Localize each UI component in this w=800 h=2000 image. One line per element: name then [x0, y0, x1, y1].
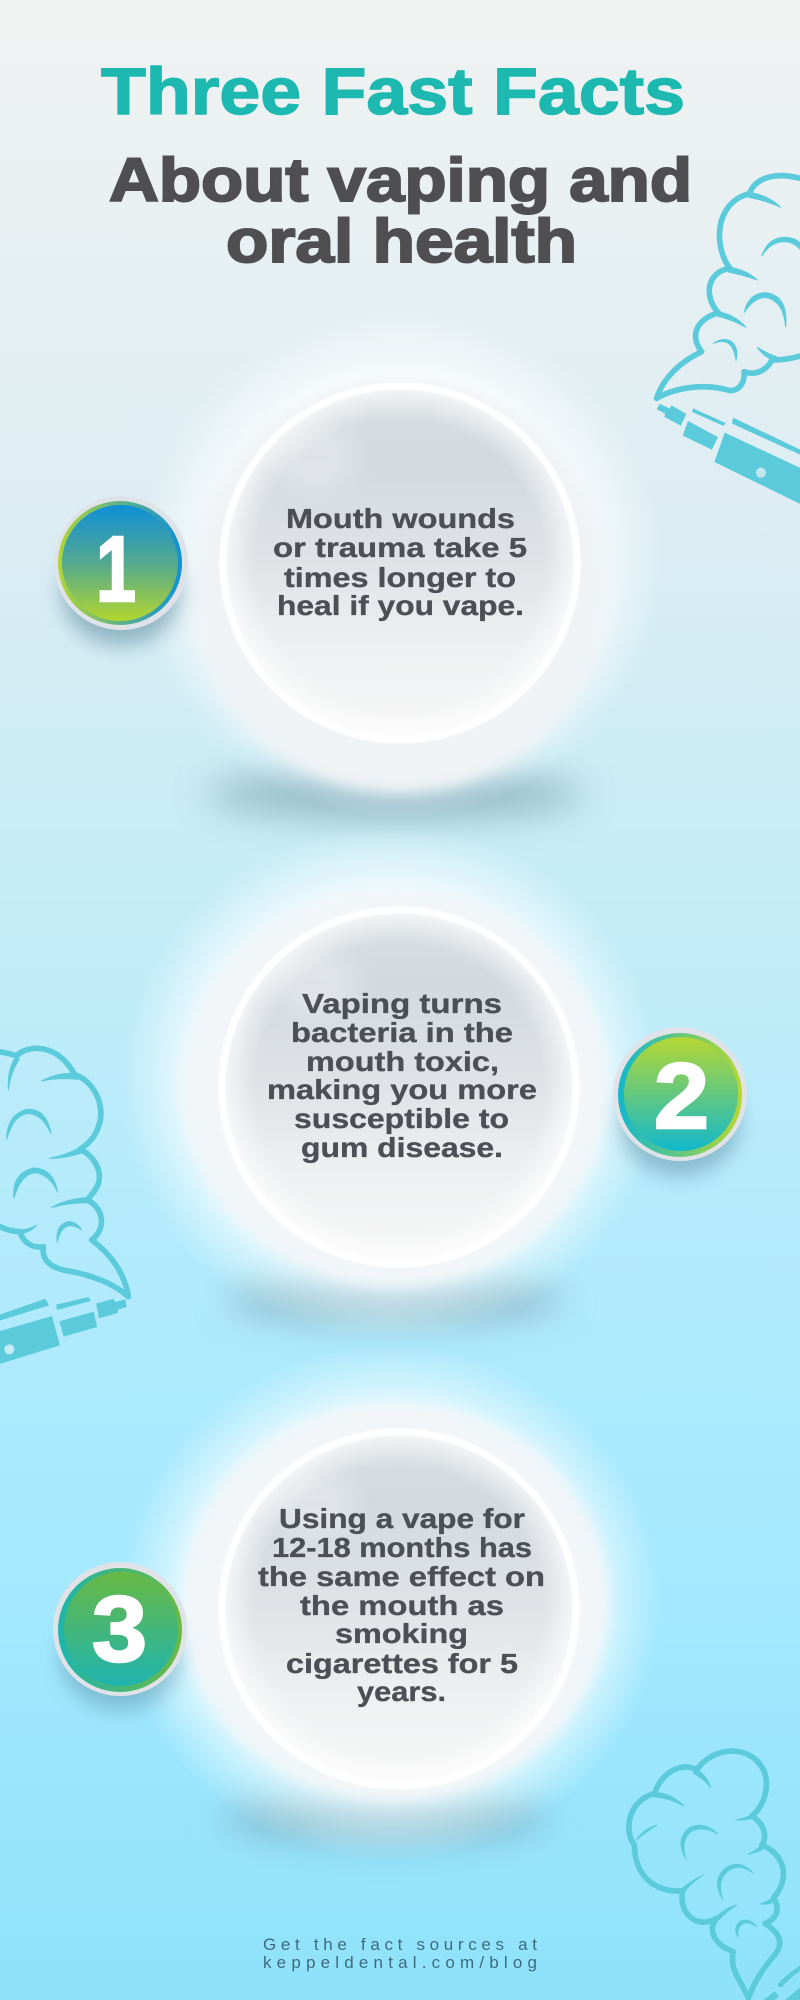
text: fact 3: the mouth as — [300, 1590, 504, 1621]
icon: vape and cloud, top right — [657, 176, 800, 503]
badge: number 3 — [53, 1562, 187, 1711]
panel: fact 3 smoke circle — [121, 1345, 661, 1861]
badge: number 2 — [613, 1027, 747, 1176]
smoke shadows under the circles — [205, 771, 585, 1842]
text: fact 3: Using a vape for — [279, 1503, 525, 1534]
text: fact 2: mouth toxic, — [306, 1046, 499, 1077]
text: fact 1: Mouth wounds — [286, 503, 515, 534]
text: fact 3: years. — [357, 1676, 446, 1707]
title: Three Fast Facts — [101, 54, 685, 128]
text: fact 2: Vaping turns — [302, 988, 502, 1019]
heading: oral health — [226, 207, 577, 275]
icon: vape and cloud, bottom right — [629, 1751, 800, 2000]
text: fact 3: 12-18 months has — [272, 1532, 532, 1563]
text: fact 2: gum disease. — [301, 1132, 503, 1163]
badge: number 3: 3 — [92, 1577, 147, 1681]
text: fact 2 — [267, 988, 537, 1163]
footer: sources: Get the fact sources at — [263, 1935, 537, 1954]
text: fact 2: susceptible to — [294, 1103, 509, 1134]
panel: fact 2 smoke circle — [121, 825, 661, 1341]
text: fact 1: times longer to — [284, 562, 516, 593]
text: fact 1: or trauma take 5 — [273, 532, 527, 563]
text: fact 1 — [273, 503, 527, 621]
icon: vape and cloud, left — [0, 1048, 128, 1363]
text: fact 2: bacteria in the — [291, 1017, 513, 1048]
footer: sources: keppeldental.com/blog — [263, 1953, 537, 1972]
badge: number 1: 1 — [96, 517, 136, 621]
text: fact 2: making you more — [267, 1074, 537, 1105]
heading — [109, 146, 692, 275]
text: fact 3: smoking — [335, 1618, 468, 1649]
text: fact 3 — [258, 1503, 545, 1707]
panel: fact 1 smoke circle — [138, 308, 662, 818]
badge: number 2: 2 — [654, 1044, 709, 1148]
badge: number 1 — [54, 496, 188, 646]
text: fact 3: the same effect on — [258, 1561, 545, 1592]
text: fact 3: cigarettes for 5 — [286, 1648, 518, 1679]
heading: About vaping and — [109, 146, 692, 214]
text: fact 1: heal if you vape. — [277, 590, 524, 621]
footer: sources — [263, 1935, 537, 1972]
